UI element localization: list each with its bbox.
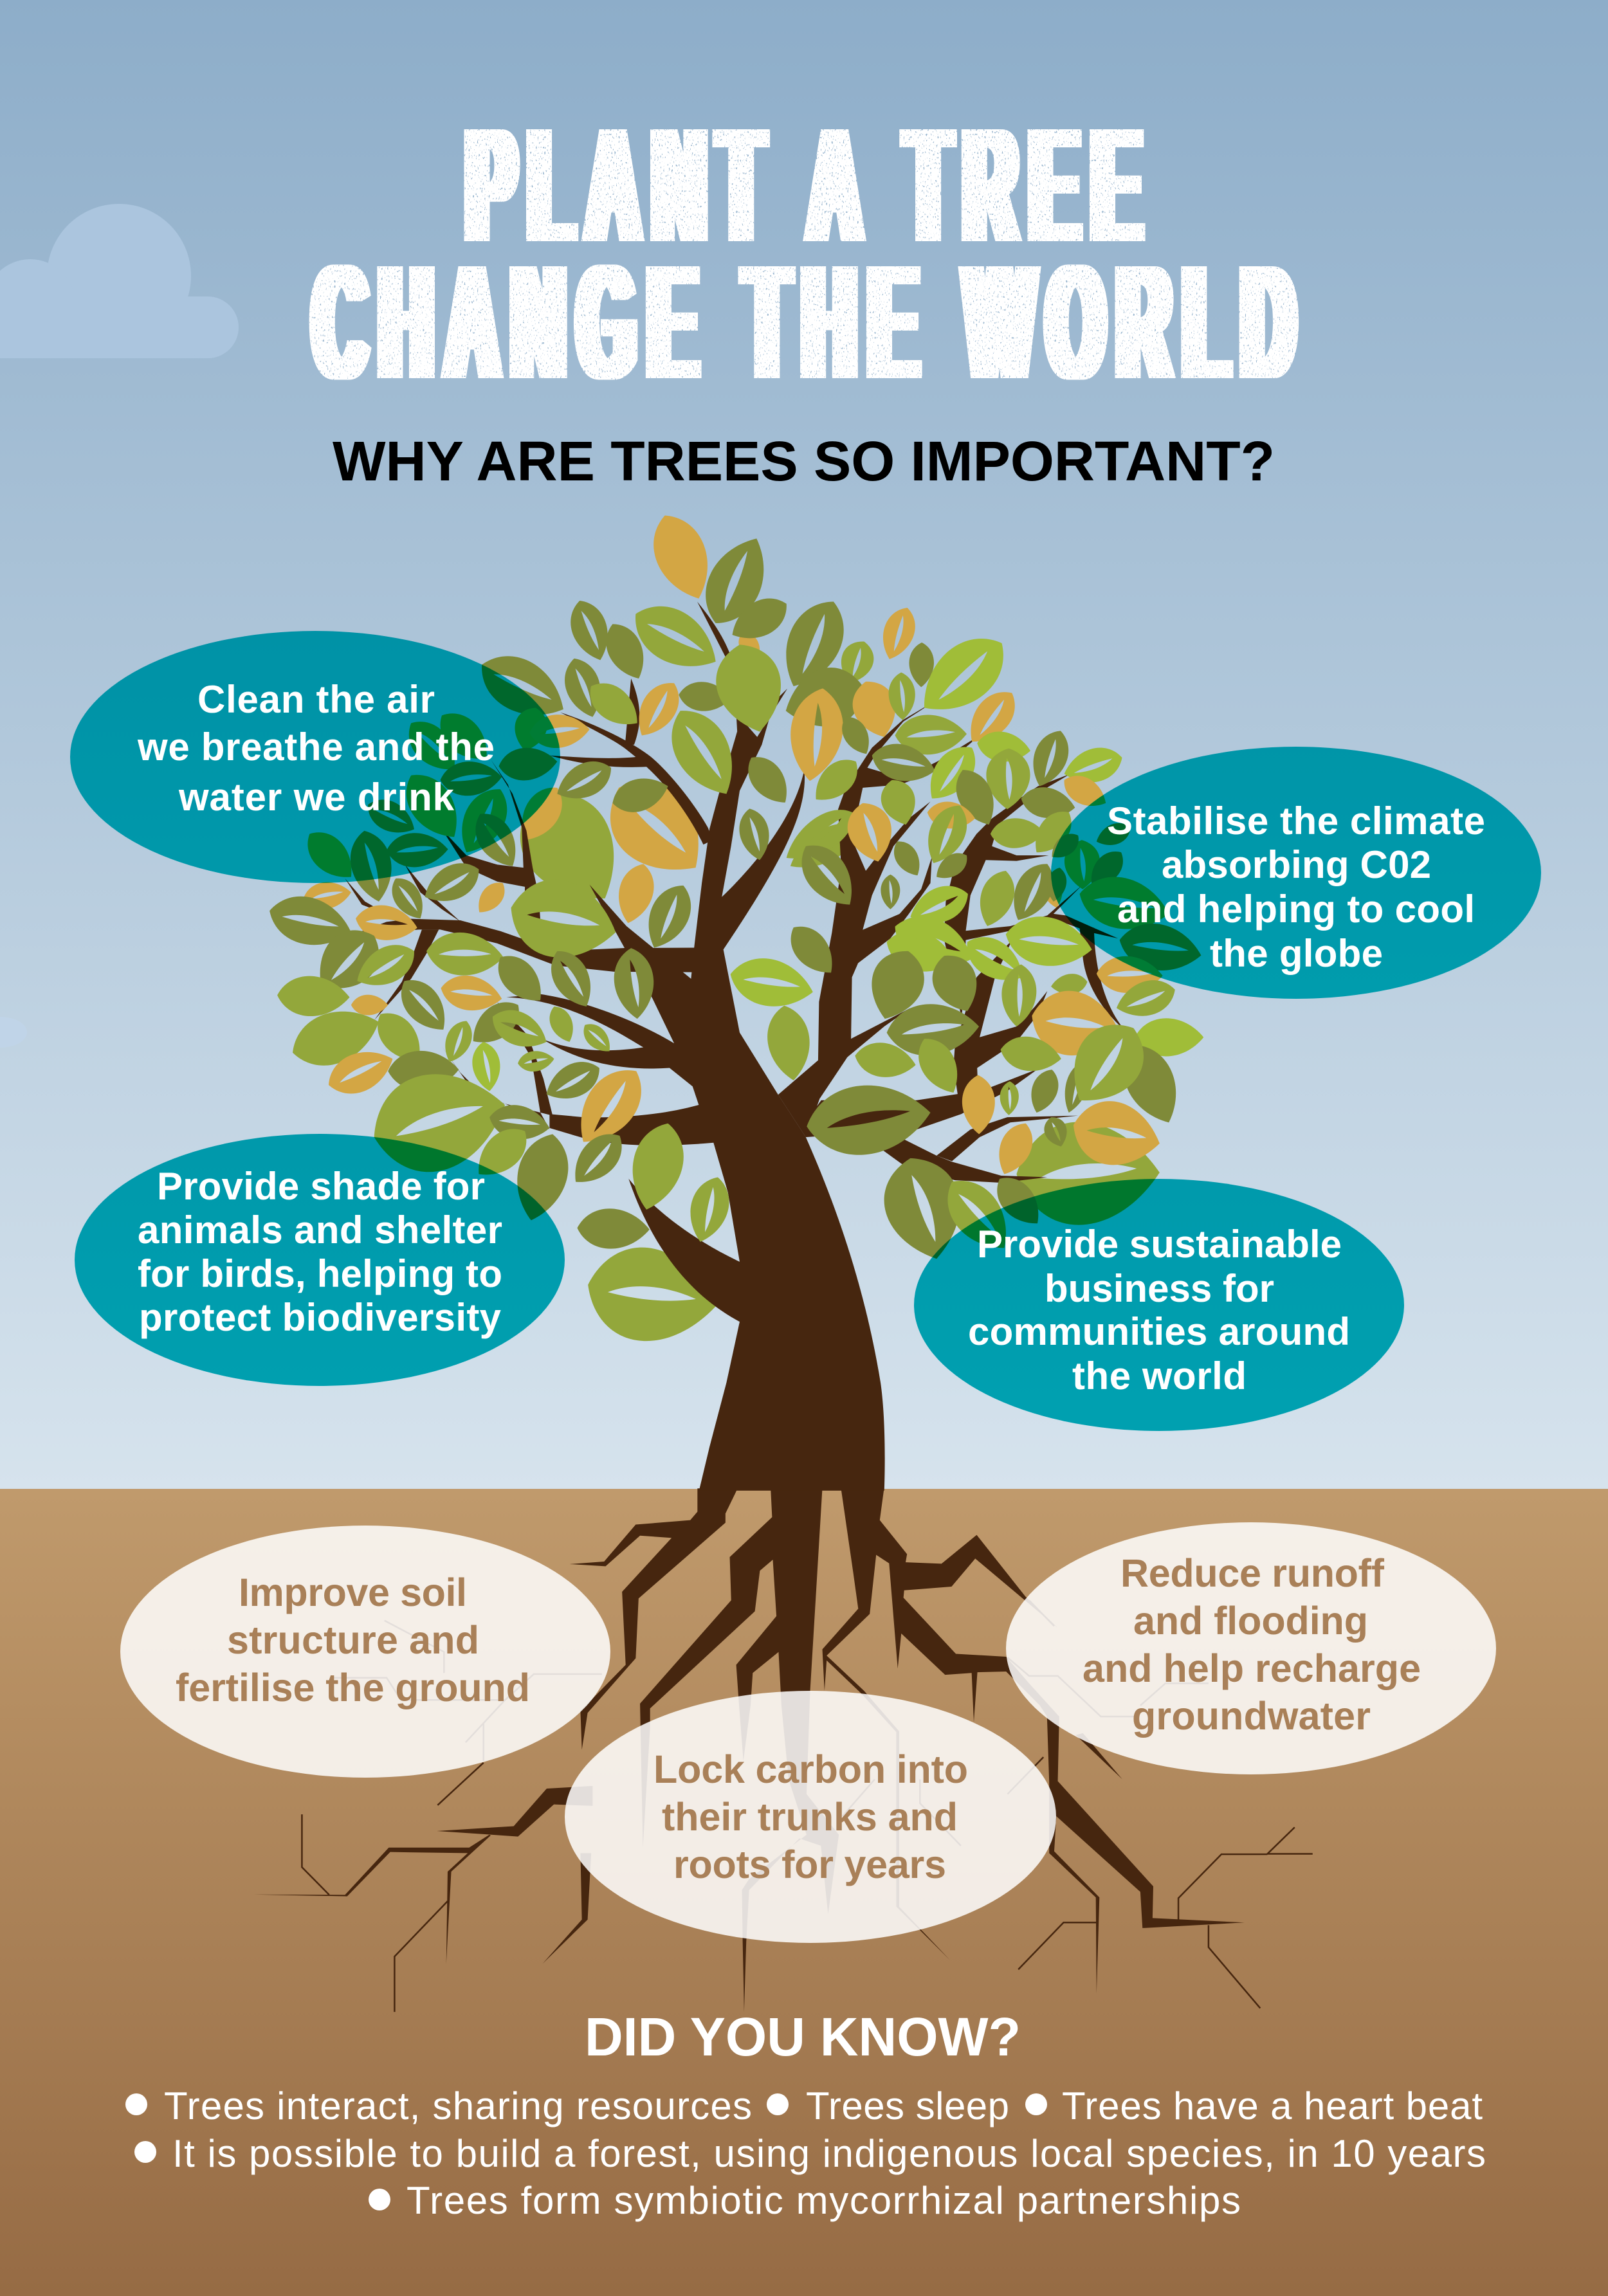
callout: reduce runoff [1006,1522,1496,1774]
callout: stabilise the climate [1051,747,1541,999]
callout: clean the air: we breathe and the [137,725,495,769]
callout: clean the air [70,631,560,883]
callout: lock carbon [565,1691,1056,1943]
callout: clean the air: Clean the air [197,678,435,721]
title [314,94,1308,413]
sky background [0,0,1608,1490]
callout: reduce runoff: groundwater [1132,1694,1371,1738]
facts list: Trees sleep [806,2084,1009,2127]
callout: stabilise the climate: Stabilise the climate [1107,799,1485,843]
callout: reduce runoff: Reduce runoff [1120,1551,1385,1595]
callout: reduce runoff: and help recharge [1083,1646,1421,1690]
callout: lock carbon: Lock carbon into [653,1747,968,1791]
facts list: Trees interact, sharing resources [164,2084,752,2127]
tree canopy: front leaves, lower left [277,916,736,1250]
callout: stabilise the climate: absorbing C02 [1162,843,1431,886]
tree canopy: front leaves, upper right [708,588,1205,978]
callout: sustainable business: Provide sustainable [977,1223,1342,1266]
callout: sustainable business: business for [1045,1267,1274,1310]
callout: lock carbon: their trunks and [662,1795,958,1839]
facts list: Trees form symbiotic mycorrhizal partnerships [407,2179,1241,2222]
facts list: Trees have a heart beat [1062,2084,1483,2127]
callout: improve soil: structure and [227,1618,479,1662]
tree roots [254,1488,1313,2012]
callout: sustainable business: the world [1072,1354,1247,1398]
subtitle: WHY ARE TREES SO IMPORTANT? [333,430,1275,493]
callout: shade and shelter: protect biodiversity [139,1296,502,1339]
tree canopy: back leaves [499,630,1160,1353]
callout: sustainable business: communities around [968,1310,1350,1353]
icon: cloud [0,204,239,358]
tree canopy: front leaves, upper left [264,506,780,970]
callout: shade and shelter: Provide shade for [157,1165,485,1208]
callout: clean the air: water we drink [178,776,455,819]
tree canopy: front leaves, lower right [726,905,1203,1268]
callout: improve soil [120,1526,610,1778]
facts list: It is possible to build a forest, using indigenous local species, in 10 years [172,2132,1486,2175]
callout: shade and shelter: animals and shelter [138,1208,502,1252]
callout: shade and shelter: for birds, helping to [138,1252,502,1295]
callout: shade and shelter [75,1134,565,1386]
callout: stabilise the climate: the globe [1210,932,1383,975]
icon: small cloud edge [0,1017,27,1048]
callout: stabilise the climate: and helping to cool [1117,888,1475,931]
callout: reduce runoff: and flooding [1133,1599,1368,1643]
callout: improve soil: Improve soil [239,1571,467,1614]
callout: sustainable business [914,1179,1404,1431]
tree trunk and branches [345,601,1126,1491]
callout: lock carbon: roots for years [673,1843,946,1886]
facts list [125,2084,1486,2222]
heading: did you know: DID YOU KNOW? [585,2007,1021,2067]
soil background [0,1489,1608,2296]
callout: improve soil: fertilise the ground [176,1666,530,1709]
